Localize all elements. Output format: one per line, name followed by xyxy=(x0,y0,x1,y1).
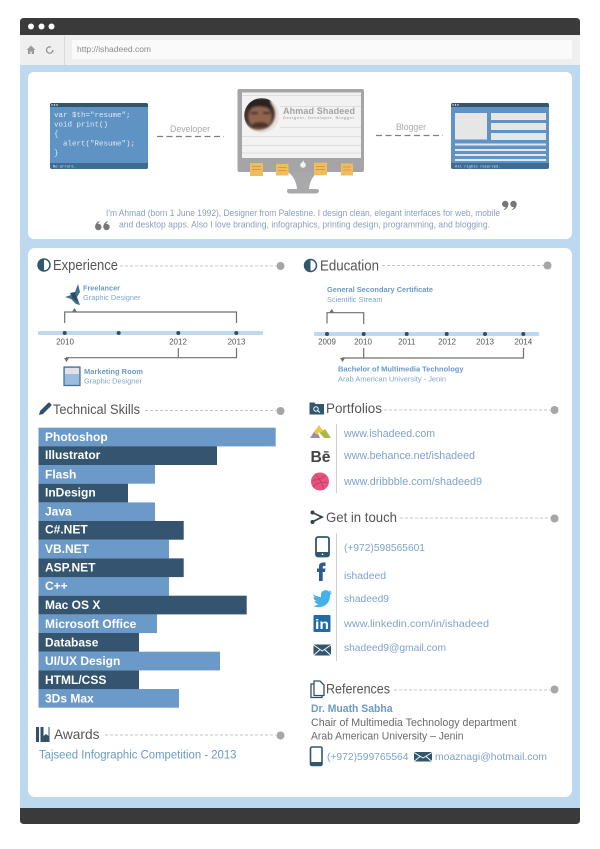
icon: dribbble xyxy=(311,472,329,490)
text: bachelor degree: Arab American University - Jenin xyxy=(338,374,446,384)
text: freelancer: Freelancer xyxy=(83,284,120,292)
bar chart: skills: UI/UX Design xyxy=(45,654,120,668)
icon: half circle xyxy=(304,260,316,272)
icon: code window: alert("Resume"); xyxy=(63,140,135,148)
icon: ishadeed logo xyxy=(310,425,331,438)
heading: education: Education xyxy=(320,258,379,274)
icon: apple logo xyxy=(300,161,306,168)
icon: code window: No errors. xyxy=(53,164,76,170)
heading: awards: Awards xyxy=(54,726,100,742)
icon: facebook xyxy=(317,562,326,581)
text: email: shadeed9@gmail.com xyxy=(344,642,446,654)
icon: twitter xyxy=(313,590,332,607)
icon: documents xyxy=(311,681,324,698)
text: intro paragraph: I'm Ahmad (born 1 June 1992), Designer from Palestine. I design clean, elegant interfaces for web, mobile xyxy=(106,208,500,218)
icon: sticky notes xyxy=(250,163,353,176)
text: marketing room xyxy=(84,367,143,386)
bracket: marketing room period xyxy=(64,348,236,362)
icon: phone xyxy=(310,747,322,766)
heading: technical skills: Technical Skills xyxy=(53,401,140,417)
heading: references: References xyxy=(326,680,390,696)
timeline: education: 2011 xyxy=(398,338,416,346)
timeline: experience: 2012 xyxy=(169,338,187,346)
icon: linkedin xyxy=(314,615,330,632)
bar chart: skills: C#.NET xyxy=(45,523,88,537)
browser toolbar xyxy=(26,36,572,65)
heading: portfolios: Portfolios xyxy=(326,400,382,416)
bracket: secondary period xyxy=(327,309,364,324)
bar chart: skills: Database xyxy=(45,636,99,650)
icon: blog window: All rights reserved. xyxy=(455,164,501,170)
text: marketing room: Graphic Designer xyxy=(84,376,142,386)
bar chart: skills: Microsoft Office xyxy=(45,617,137,631)
section: education xyxy=(304,258,552,384)
timeline: experience: 2010 xyxy=(56,338,74,346)
link: behance: www.behance.net/ishadeed xyxy=(343,450,475,462)
section: get in touch xyxy=(310,509,558,661)
text: intro paragraph: and desktop apps. Also I love branding, infographics, printing design, programming, and blogging. xyxy=(119,220,490,230)
heading: get in touch: Get in touch xyxy=(326,509,397,525)
section: experience xyxy=(38,258,284,386)
label: developer: Developer xyxy=(170,124,210,135)
text: reference phone: (+972)599765564 xyxy=(327,751,409,763)
section: awards xyxy=(36,726,284,762)
icon: quote marks xyxy=(95,201,517,230)
heading: experience: Experience xyxy=(53,258,118,274)
icon: monitor with profile xyxy=(238,89,364,194)
icon: phone xyxy=(316,537,329,556)
text: reference role: Arab American University – Jenin xyxy=(311,730,464,742)
panel: main content xyxy=(28,248,572,797)
bar chart: skills: Illustrator xyxy=(45,448,101,462)
text: twitter handle: shadeed9 xyxy=(344,593,389,605)
bar chart: skills: 3Ds Max xyxy=(45,692,94,706)
timeline: education: 2009 xyxy=(318,338,336,346)
text: freelancer: Graphic Designer xyxy=(83,293,141,302)
icon: code window: var $th="resume"; xyxy=(54,112,131,120)
timeline: education: 2013 xyxy=(476,338,494,346)
bar chart: skills: C++ xyxy=(45,579,68,593)
icon: half circle xyxy=(38,259,50,271)
label: blogger xyxy=(376,122,443,136)
panel: intro xyxy=(28,72,572,239)
timeline: experience: 2013 xyxy=(228,338,246,346)
timeline: education: 2014 xyxy=(514,338,533,346)
bracket: freelancer period xyxy=(65,308,236,323)
text: phone number: (+972)598565601 xyxy=(344,542,425,554)
text: intro paragraph xyxy=(106,208,500,230)
text: bachelor degree xyxy=(338,364,464,384)
bar chart: skills: HTML/CSS xyxy=(45,673,106,687)
bar chart: skills: Mac OS X xyxy=(45,598,100,612)
text: reference role xyxy=(311,717,516,742)
link: ishadeed: www.ishadeed.com xyxy=(343,428,435,440)
icon: linkedin: in xyxy=(315,616,329,632)
text: award entry: Tajseed Infographic Competition - 2013 xyxy=(39,750,236,762)
icon: code window: void print() xyxy=(54,122,108,130)
timeline: education xyxy=(314,332,539,346)
timeline: education: 2010 xyxy=(354,338,372,346)
text: reference role: Chair of Multimedia Technology department xyxy=(311,717,516,729)
bar chart: skills: Java xyxy=(45,504,72,518)
section: technical skills xyxy=(38,401,284,708)
bar chart: skills: ASP.NET xyxy=(45,560,96,574)
icon: freelancer logo xyxy=(65,284,80,305)
bar chart: skills: InDesign xyxy=(45,486,96,500)
icon: code window: { xyxy=(54,131,59,139)
bracket: bachelor period xyxy=(340,348,524,362)
icon: mail xyxy=(414,752,432,762)
text: reference email: moaznagi@hotmail.com xyxy=(435,751,547,763)
icon: profile photo xyxy=(243,98,279,133)
icon: monitor with profile: Ahmad Shadeed xyxy=(283,106,355,116)
icon: code window xyxy=(50,103,148,170)
text: facebook handle: ishadeed xyxy=(344,570,386,582)
icon: monitor with profile: Designer, Developer, Blogger xyxy=(283,115,354,120)
bar chart: skills xyxy=(38,428,276,708)
icon: blog window xyxy=(451,103,549,170)
bar chart: skills: VB.NET xyxy=(45,542,90,556)
section: portfolios xyxy=(310,400,558,493)
text: bachelor degree: Bachelor of Multimedia Technology xyxy=(338,364,464,374)
icon: share xyxy=(310,510,324,524)
timeline: experience xyxy=(38,331,263,346)
text: secondary certificate: Scientific Stream xyxy=(327,295,382,304)
icon: awards book xyxy=(36,727,50,742)
icon: mail xyxy=(314,644,331,656)
bar chart: skills: Flash xyxy=(45,468,76,482)
icon: marketing room logo xyxy=(64,367,80,386)
section: references xyxy=(310,680,558,766)
text: freelancer xyxy=(83,284,141,302)
text: reference name: Dr. Muath Sabha xyxy=(311,703,393,715)
text: secondary certificate: General Secondary Certificate xyxy=(327,285,433,294)
text: linkedin url: www.linkedin.com/in/ishadeed xyxy=(343,618,489,630)
label: blogger: Blogger xyxy=(396,122,426,133)
icon: pencil xyxy=(39,402,52,415)
timeline: education: 2012 xyxy=(438,338,456,346)
text: marketing room: Marketing Room xyxy=(84,367,143,376)
icon: folder search xyxy=(310,402,324,414)
bar chart: skills: Photoshop xyxy=(45,430,108,444)
text: secondary certificate xyxy=(327,285,433,304)
icon: code window: } xyxy=(54,150,59,158)
browser toolbar: http://ishadeed.com xyxy=(77,44,151,54)
label: developer xyxy=(157,124,224,136)
link: dribbble: www.dribbble.com/shadeed9 xyxy=(343,476,482,488)
icon: behance: Bē xyxy=(310,449,331,466)
